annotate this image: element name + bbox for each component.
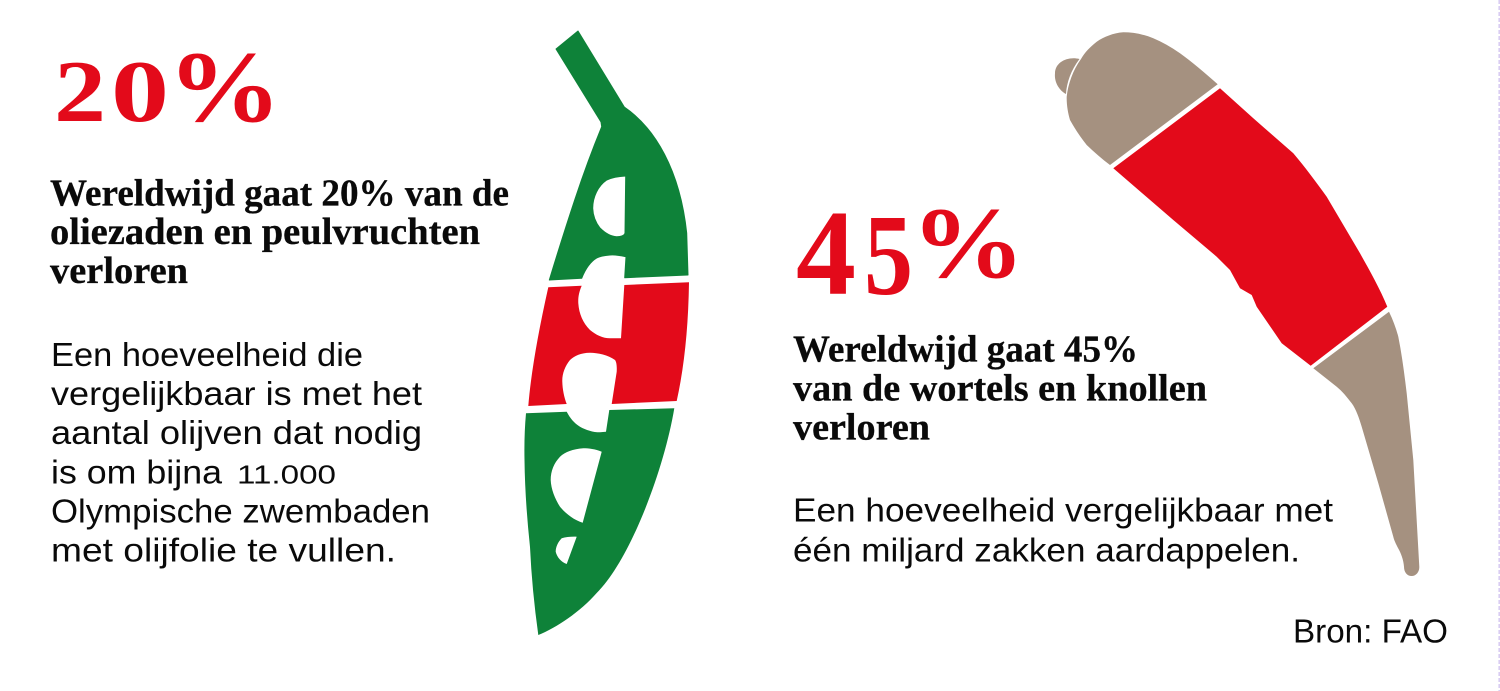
icon: carrot, 45% red section (1055, 32, 1419, 576)
heading: oilseeds and pulses: Wereldwijd gaat 20% van de (50, 173, 509, 215)
pod red middle section (528, 282, 689, 406)
text block: potato comparison: Een hoeveelheid vergelijkbaar met (793, 493, 1334, 530)
icon: pea pod, 20% red section (524, 31, 689, 635)
heading: roots and tubers (793, 329, 1207, 448)
text block: olive comparison: met olijfolie te vullen. (51, 533, 396, 570)
heading: oilseeds and pulses: verloren (50, 250, 188, 292)
stat: 20% (54, 31, 282, 144)
carrot tan bottom section (1313, 312, 1419, 576)
text block: potato comparison (793, 493, 1334, 570)
stat: 45% (796, 186, 1025, 321)
stat: 45%: 5 (864, 192, 913, 320)
stat: 20%: % (168, 31, 282, 144)
heading: roots and tubers: Wereldwijd gaat 45% (793, 329, 1138, 371)
stat: 20%: 0 (111, 44, 169, 141)
stat: 20%: 2 (54, 44, 106, 141)
text block: olive comparison (51, 337, 430, 570)
heading: roots and tubers: van de wortels en knollen (793, 368, 1207, 410)
text block: olive comparison: Olympische zwembaden (51, 494, 430, 531)
pod bottom section (524, 408, 674, 635)
carrot tan top section (1067, 32, 1218, 165)
carrot top knob (1055, 58, 1080, 94)
pod top section (549, 31, 688, 280)
heading: roots and tubers: verloren (793, 406, 930, 448)
text block: olive comparison: 11.000 (237, 459, 336, 489)
heading: oilseeds and pulses (50, 173, 509, 292)
text block: olive comparison: vergelijkbaar is met het (51, 376, 423, 413)
text block: olive comparison: aantal olijven dat nodig (51, 415, 422, 452)
text block: olive comparison: is om bijna (51, 454, 222, 491)
text block: potato comparison: één miljard zakken aardappelen. (793, 533, 1300, 570)
source: Bron: FAO (1293, 614, 1448, 651)
text block: olive comparison: Een hoeveelheid die (51, 337, 363, 374)
stat: 45%: 4 (796, 186, 856, 321)
carrot red middle section (1113, 88, 1387, 366)
stat: 45%: % (911, 187, 1025, 300)
heading: oilseeds and pulses: oliezaden en peulvruchten (50, 211, 480, 253)
